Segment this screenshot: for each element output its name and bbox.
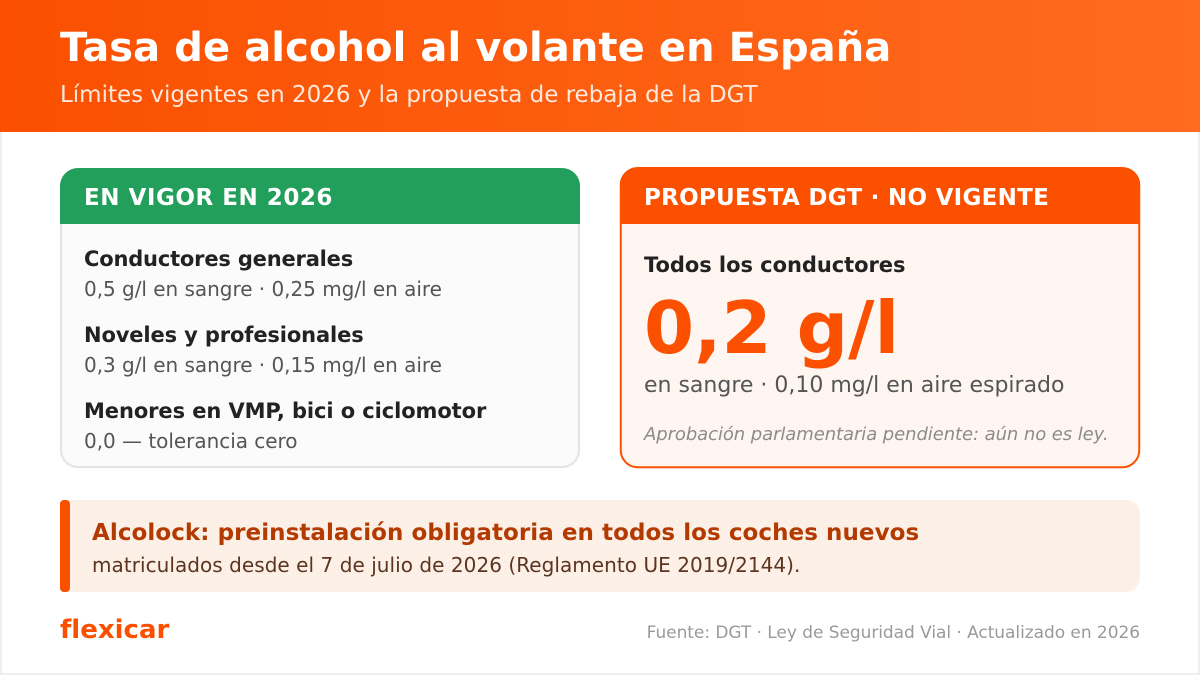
rule: conductores generales: Conductores generales bbox=[84, 247, 353, 271]
subtitle: Límites vigentes en 2026 y la propuesta de rebaja de la DGT bbox=[60, 82, 758, 108]
value detail: en sangre · 0,10 mg/l en aire espirado bbox=[644, 373, 1064, 398]
rule value: conductores generales: 0,5 g/l en sangre · 0,25 mg/l en aire bbox=[84, 277, 442, 301]
callout text: matriculados desde el 7 de julio de 2026 (Reglamento UE 2019/2144). bbox=[92, 553, 800, 577]
rule: noveles y profesionales: Noveles y profesionales bbox=[84, 323, 364, 347]
note: Aprobación parlamentaria pendiente: aún no es ley. bbox=[644, 424, 1108, 445]
rule: menores: Menores en VMP, bici o ciclomotor bbox=[84, 399, 486, 423]
panel heading: en vigor: EN VIGOR EN 2026 bbox=[84, 185, 333, 211]
callout: alcolock bbox=[60, 500, 1140, 592]
audience label: Todos los conductores bbox=[644, 253, 905, 277]
brand logo: flexicar bbox=[60, 615, 169, 645]
big value: 0,2 g/l bbox=[644, 286, 899, 370]
source: Fuente: DGT · Ley de Seguridad Vial · Actualizado en 2026 bbox=[647, 623, 1140, 643]
panel heading: propuesta: PROPUESTA DGT · NO VIGENTE bbox=[644, 185, 1049, 211]
header banner bbox=[0, 0, 1200, 132]
callout heading: Alcolock: preinstalación obligatoria en todos los coches nuevos bbox=[92, 520, 919, 546]
title: Tasa de alcohol al volante en España bbox=[60, 25, 891, 71]
panel: propuesta DGT bbox=[620, 168, 1140, 467]
rule value: menores: 0,0 — tolerancia cero bbox=[84, 429, 297, 453]
rule value: noveles y profesionales: 0,3 g/l en sangre · 0,15 mg/l en aire bbox=[84, 353, 442, 377]
panel: en vigor en 2026 bbox=[60, 168, 580, 467]
